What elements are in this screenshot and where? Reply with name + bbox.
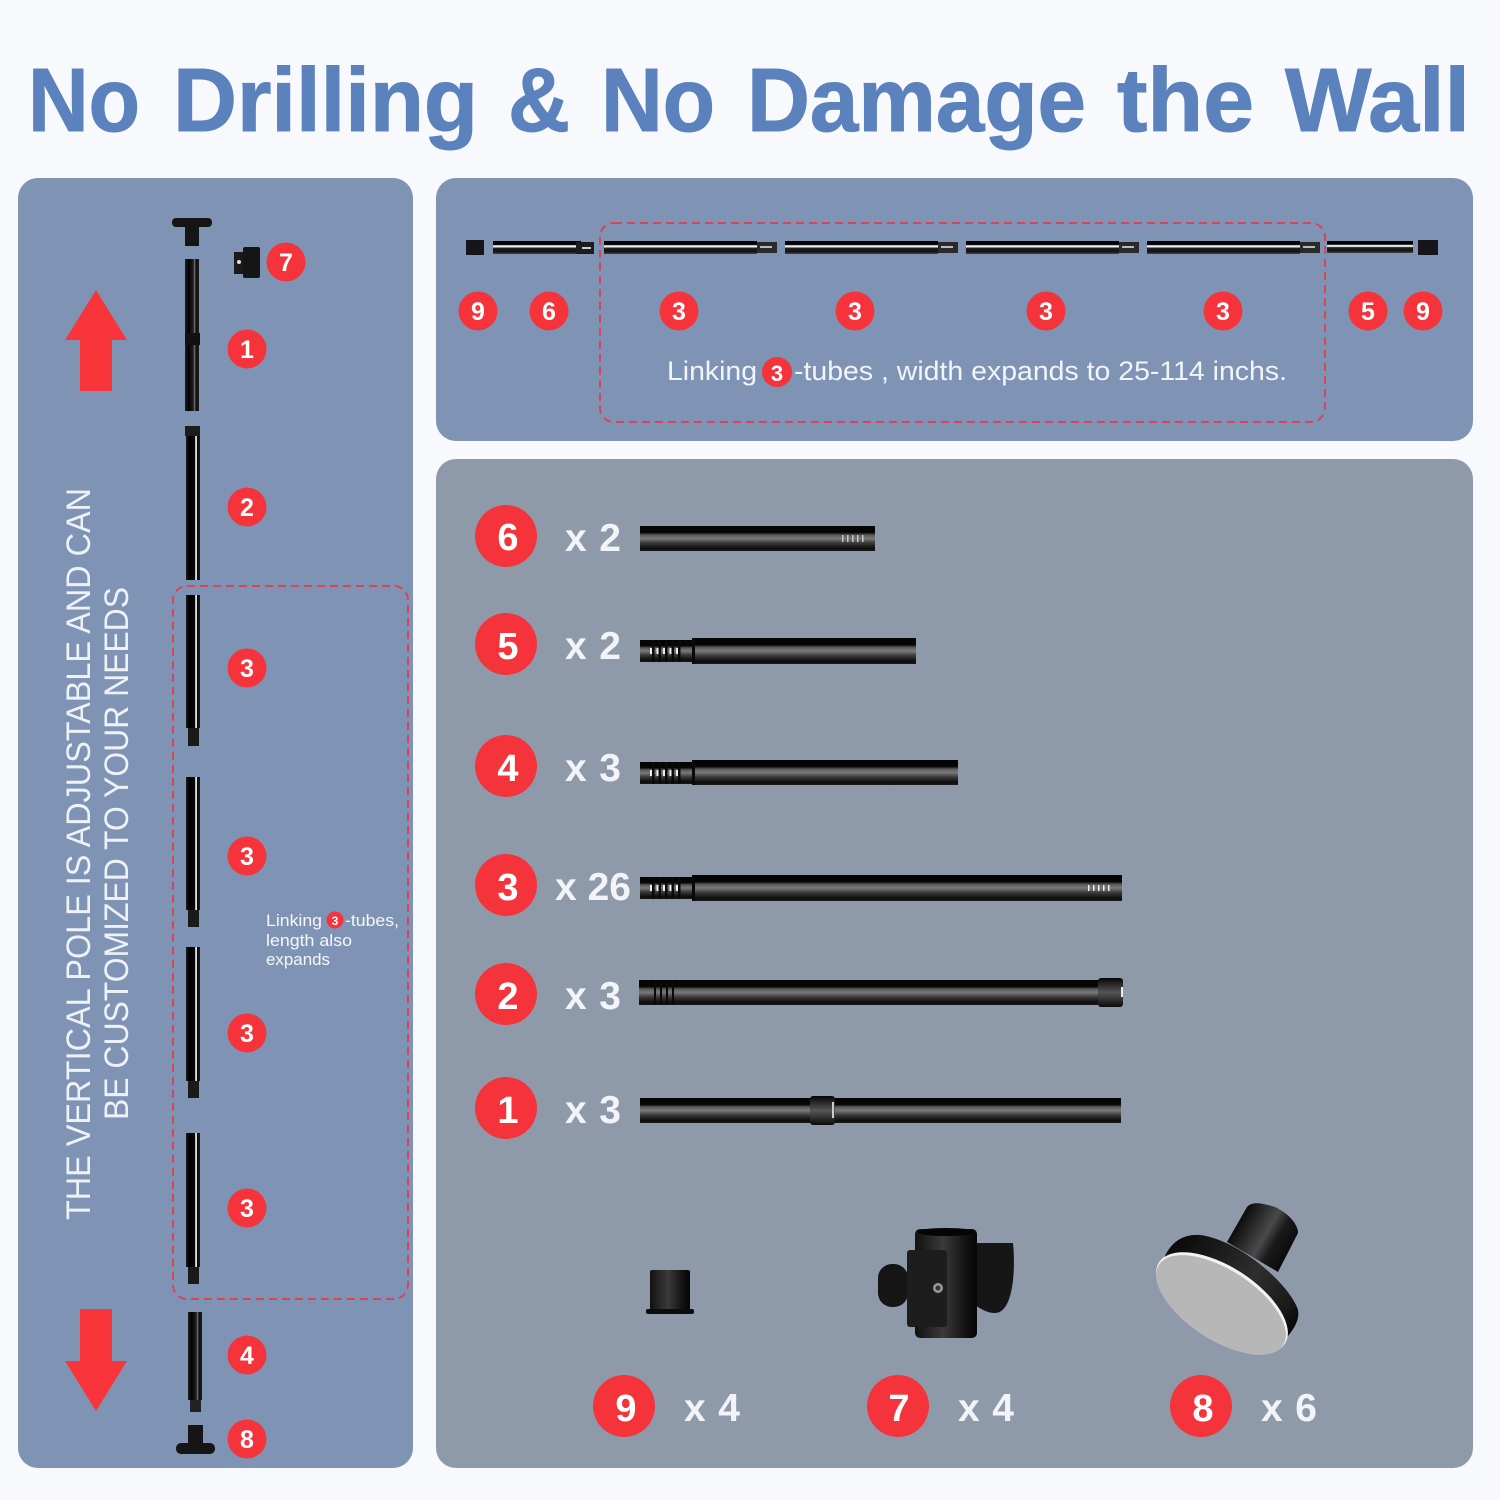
badge numbers: 3 — [240, 843, 254, 871]
part 9 right — [1418, 240, 1438, 255]
badge numbers: 5 — [1361, 298, 1375, 326]
badge numbers: 4 — [240, 1342, 254, 1370]
part 3 vertical b — [186, 777, 200, 927]
badge numbers: 3 — [1216, 298, 1230, 326]
title: the — [1117, 51, 1254, 151]
badges — [458, 292, 1442, 330]
dashed group: linked tubes — [600, 223, 1325, 422]
part 5 horizontal — [1327, 241, 1413, 253]
badge numbers: 3 — [240, 655, 254, 683]
note: linking tubes — [266, 911, 399, 969]
badge numbers — [471, 298, 1430, 326]
note: linking tubes: expands — [266, 950, 330, 969]
row: part 3: 3 — [497, 867, 519, 909]
part 3 vertical d — [186, 1133, 200, 1284]
rotated caption: BE CUSTOMIZED TO YOUR NEEDS — [98, 587, 136, 1120]
panel: vertical pole assembly — [18, 178, 413, 1468]
rotated caption: THE VERTICAL POLE IS ADJUSTABLE AND CAN — [60, 488, 98, 1220]
row: part 3: x 26 — [555, 866, 631, 909]
note: width expansion: 3 — [771, 361, 783, 386]
part 3 vertical c — [186, 947, 200, 1098]
row: part 3 — [475, 854, 1122, 916]
note: linking tubes: length also — [266, 931, 352, 950]
item: part 8 wall pad — [1139, 1203, 1305, 1375]
row: part 5: x 2 — [565, 625, 621, 668]
part 3 horizontal a — [604, 241, 777, 254]
part 3 horizontal b — [785, 241, 958, 254]
part 7 small clamp — [234, 247, 260, 278]
title: & — [508, 51, 570, 151]
row: part 6 — [475, 505, 875, 567]
note: linking tubes: 3 — [332, 914, 339, 928]
badge numbers: 6 — [542, 298, 556, 326]
note: width expansion: -tubes , width expands to 25-114 inchs. — [794, 356, 1287, 386]
badge numbers: 9 — [471, 298, 485, 326]
badge numbers: 7 — [279, 249, 293, 277]
row: part 1: x 3 — [565, 1089, 621, 1132]
part 1 vertical — [185, 259, 200, 411]
part 8 top — [172, 218, 212, 246]
bottom badges: 9 — [615, 1388, 637, 1430]
row: part 2: x 3 — [565, 975, 621, 1018]
panel: horizontal pole assembly — [436, 178, 1473, 441]
row: part 4: x 3 — [565, 747, 621, 790]
bottom badges: x 6 — [1261, 1387, 1317, 1430]
part 4 vertical — [188, 1312, 202, 1412]
part 8 bottom — [176, 1425, 215, 1454]
row: part 5: 5 — [497, 626, 519, 668]
row: part 6: 6 — [497, 517, 519, 559]
part 9 left — [466, 240, 484, 255]
badge numbers: 9 — [1416, 298, 1430, 326]
row: part 4: 4 — [497, 748, 519, 790]
part 3 horizontal d — [1147, 241, 1320, 254]
bottom badges — [593, 1375, 1317, 1437]
badge numbers — [240, 249, 293, 1454]
badge numbers: 3 — [240, 1195, 254, 1223]
item: part 9 sleeve — [646, 1270, 694, 1314]
title: Drilling — [173, 51, 478, 151]
note: width expansion: Linking — [667, 356, 757, 386]
title: No — [28, 51, 140, 151]
part 2 vertical — [185, 426, 200, 580]
bottom badges: 8 — [1192, 1388, 1214, 1430]
row: part 1 — [475, 1077, 1121, 1139]
rotated caption — [60, 488, 136, 1220]
badges — [228, 242, 306, 1458]
badge numbers: 8 — [240, 1426, 254, 1454]
row: part 2 — [475, 963, 1123, 1025]
note: linking tubes: Linking — [266, 911, 322, 930]
arrow: down — [65, 1309, 127, 1411]
bottom badges: 7 — [888, 1388, 910, 1430]
item: part 7 clamp — [878, 1228, 1014, 1338]
badge numbers: 3 — [672, 298, 686, 326]
title — [28, 51, 1470, 151]
row: part 2: 2 — [497, 976, 519, 1018]
badge numbers: 3 — [1039, 298, 1053, 326]
dashed group: linked tubes — [173, 586, 408, 1299]
note: linking tubes: -tubes, — [345, 911, 399, 930]
row: part 5 — [475, 613, 916, 675]
badge numbers: 1 — [240, 336, 254, 364]
row: part 1: 1 — [497, 1090, 519, 1132]
badge numbers: 3 — [240, 1020, 254, 1048]
title: Wall — [1285, 51, 1470, 151]
part 3 vertical a — [186, 595, 200, 746]
row: part 4 — [475, 735, 958, 797]
badge numbers: 2 — [240, 494, 254, 522]
panel: parts list — [436, 459, 1473, 1468]
badge numbers: 3 — [848, 298, 862, 326]
arrow: up — [65, 290, 127, 391]
part 3 horizontal c — [966, 241, 1139, 254]
bottom badges: x 4 — [684, 1387, 740, 1430]
row: part 6: x 2 — [565, 517, 621, 560]
title: No — [601, 51, 715, 151]
bottom badges: x 4 — [958, 1387, 1014, 1430]
title: Damage — [747, 51, 1086, 151]
part 6 horizontal — [493, 241, 594, 254]
